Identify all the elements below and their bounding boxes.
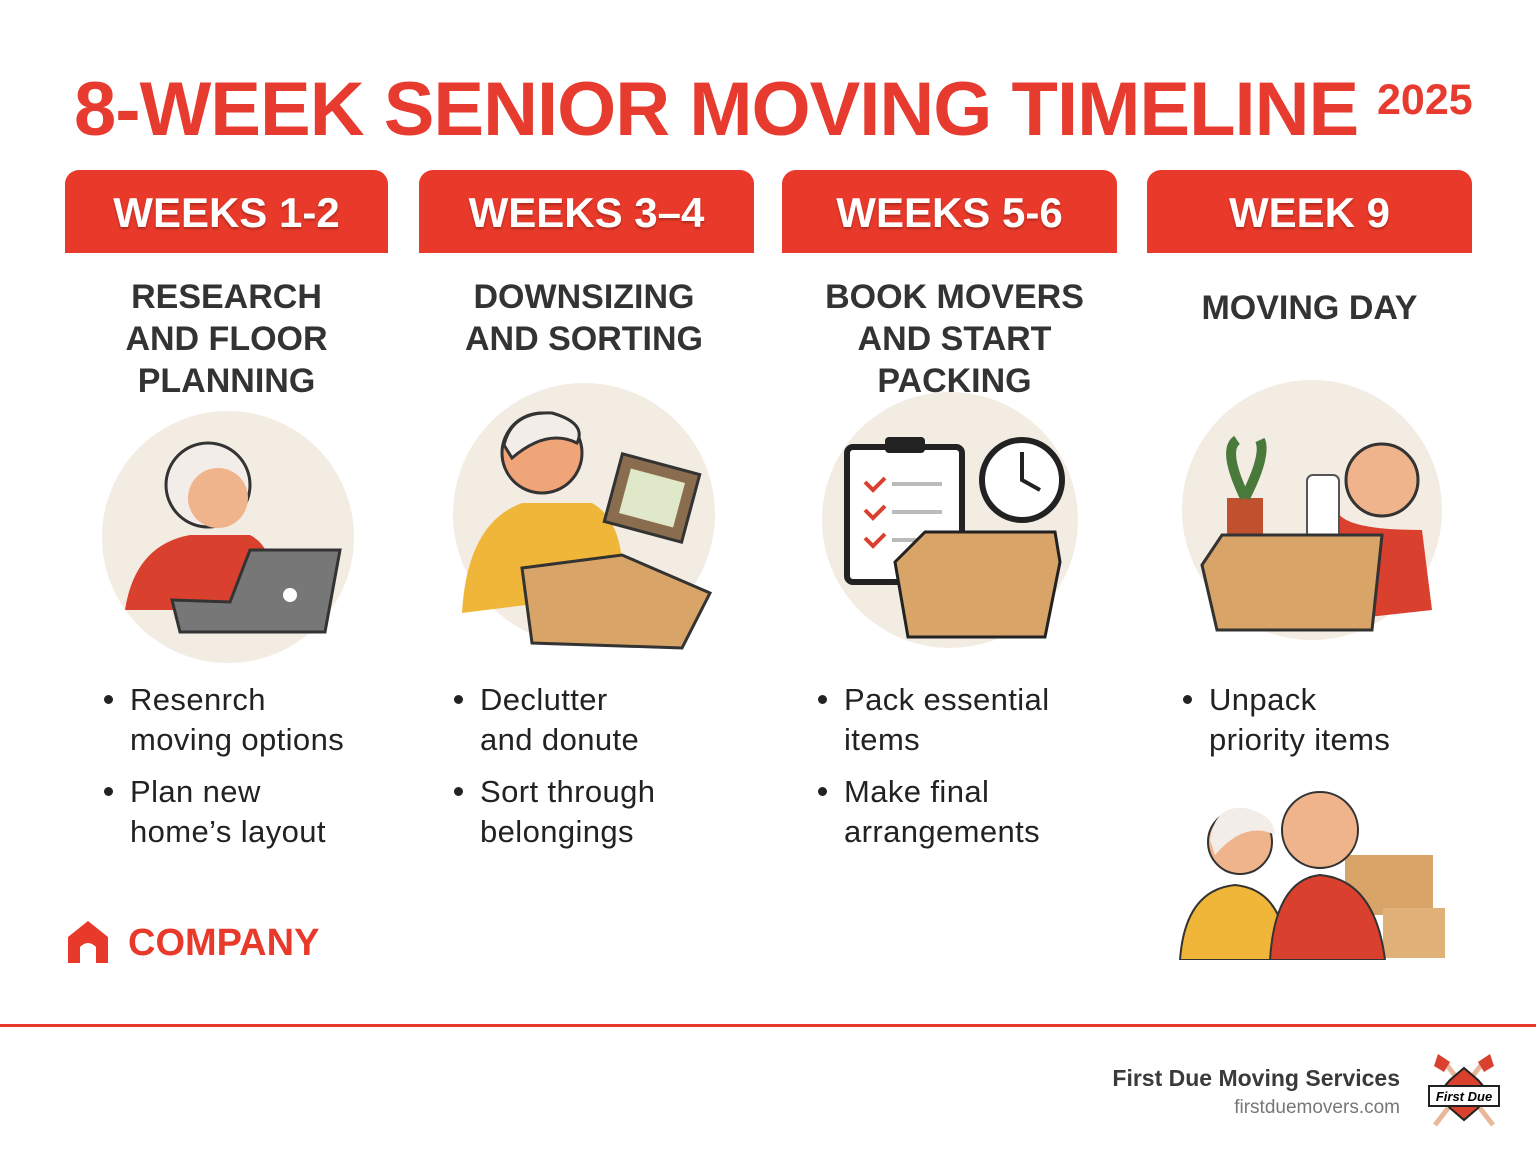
illustration: packing <box>822 392 1078 648</box>
icon: house <box>68 921 108 963</box>
subtitle 2 <box>465 278 703 358</box>
bullets 2 <box>454 682 655 849</box>
header: weeks 5-6 <box>782 170 1117 253</box>
footer text <box>1112 1065 1400 1118</box>
bullets 2: Declutter <box>480 682 608 717</box>
header: week 9: WEEK 9 <box>1229 189 1390 236</box>
bullets 2: and donute <box>480 722 639 757</box>
bullets 1: moving options <box>130 722 344 757</box>
subtitle 4: MOVING DAY <box>1201 289 1418 327</box>
footer logo <box>1428 1054 1500 1126</box>
subtitle 3 <box>825 278 1084 400</box>
illustration: research <box>102 411 354 663</box>
illustration: seniors with boxes <box>1179 791 1445 960</box>
subtitle 3: PACKING <box>877 362 1032 400</box>
header: weeks 3-4: WEEKS 3–4 <box>469 189 704 236</box>
bullets 4 <box>1183 682 1390 757</box>
subtitle 1: RESEARCH <box>131 278 322 316</box>
subtitle 1: AND FLOOR <box>125 320 328 358</box>
subtitle 2: DOWNSIZING <box>474 278 694 316</box>
header: weeks 1-2: WEEKS 1-2 <box>113 189 340 236</box>
header: weeks 3-4 <box>419 170 754 253</box>
title year: 2025 <box>1377 76 1473 124</box>
bullets 3: Make final <box>844 774 989 809</box>
footer text: First Due Moving Services <box>1112 1065 1400 1091</box>
bullets 3: Pack essential <box>844 682 1049 717</box>
footer logo: First Due <box>1436 1089 1492 1104</box>
bullets 2: Sort through <box>480 774 655 809</box>
bullets 3: items <box>844 722 920 757</box>
bullets 2: belongings <box>480 814 634 849</box>
illustration: downsizing <box>453 383 715 650</box>
title: 8-WEEK SENIOR MOVING TIMELINE <box>74 67 1358 152</box>
subtitle 2: AND SORTING <box>465 320 703 358</box>
subtitle 3: BOOK MOVERS <box>825 278 1084 316</box>
bullets 1: Resenrch <box>130 682 266 717</box>
bullets 4: Unpack <box>1209 682 1317 717</box>
header: weeks 1-2 <box>65 170 388 253</box>
bullets 1 <box>104 682 344 849</box>
company logo: COMPANY <box>128 922 319 964</box>
bullets 1: home’s layout <box>130 814 326 849</box>
bullets 3: arrangements <box>844 814 1040 849</box>
bullets 4: priority items <box>1209 722 1390 757</box>
header: week 9 <box>1147 170 1472 253</box>
subtitle 3: AND START <box>858 320 1051 358</box>
footer divider <box>0 1024 1536 1027</box>
illustration: moving day <box>1182 380 1442 640</box>
header: weeks 5-6: WEEKS 5-6 <box>836 189 1063 236</box>
subtitle 1 <box>125 278 328 400</box>
footer text: firstduemovers.com <box>1234 1097 1400 1118</box>
bullets 3 <box>818 682 1049 849</box>
bullets 1: Plan new <box>130 774 261 809</box>
subtitle 1: PLANNING <box>138 362 315 400</box>
